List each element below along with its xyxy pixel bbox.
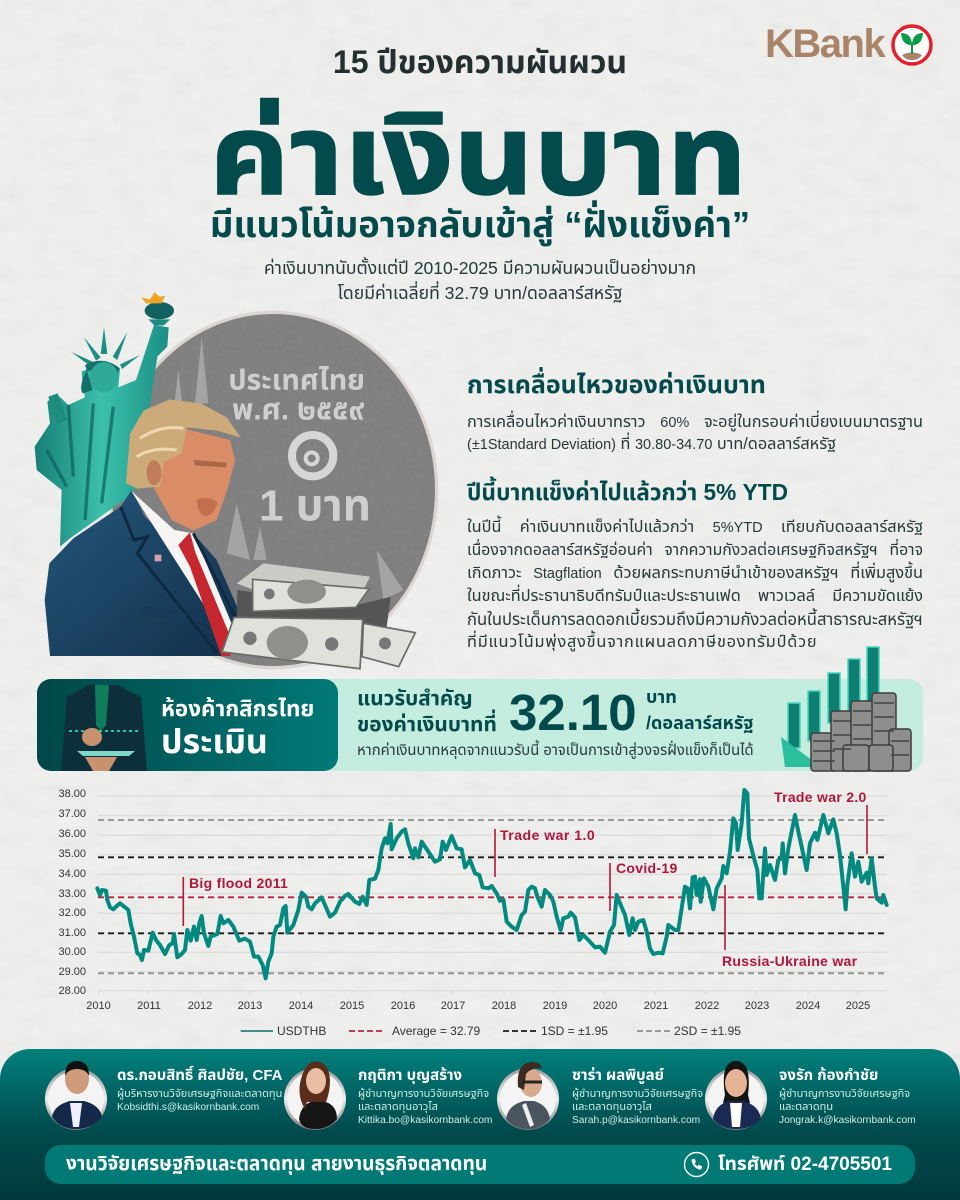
contact text: และตลาดทุนอาวุโส bbox=[572, 1101, 652, 1113]
x axis labels: 2017 bbox=[441, 1000, 465, 1012]
body text: year to date: ที่มีแนวโน้มพุ่งสูงขึ้นจากแผนลดภาษีของทรัมป์ด้วย bbox=[467, 633, 817, 651]
annotation: Trade war 2.0: Trade war 2.0 bbox=[774, 789, 867, 805]
contact text: Jongrak.k@kasikornbank.com bbox=[779, 1115, 916, 1126]
x axis labels: 2015 bbox=[340, 1000, 364, 1012]
x axis labels: 2024 bbox=[796, 1000, 820, 1012]
assessment label: ห้องค้ากสิกรไทย bbox=[161, 696, 314, 721]
contact text: ผู้ชำนาญการงานวิจัยเศรษฐกิจ bbox=[572, 1088, 703, 1100]
contact text bbox=[358, 1067, 492, 1126]
contact text: จงรัก ก้องกำชัย bbox=[779, 1067, 878, 1084]
y axis labels: 34.00 bbox=[58, 868, 86, 880]
contact bar bbox=[45, 1145, 915, 1184]
icon: statue of liberty bbox=[35, 292, 174, 547]
annotation: Russia-Ukraine war: Russia-Ukraine war bbox=[722, 953, 858, 969]
department name: งานวิจัยเศรษฐกิจและตลาดทุน สายงานธุรกิจตลาดทุน bbox=[66, 1154, 487, 1175]
dark panel: assessment bbox=[37, 679, 338, 771]
legend: 2SD = ±1.95 bbox=[674, 1024, 741, 1038]
y axis labels: 31.00 bbox=[58, 927, 86, 939]
intro text: ค่าเงินบาทนับตั้งแต่ปี 2010-2025 มีความผันผวนเป็นอย่างมาก bbox=[264, 258, 696, 278]
coin: ประเทศไทย bbox=[228, 364, 365, 396]
assessment word: ประเมิน bbox=[161, 723, 268, 761]
y axis labels bbox=[58, 788, 86, 997]
body text: year to date: กันในประเด็นการลดดอกเบี้ยรวมถึงมีความกังวลต่อหนี้สาธารณะสหรัฐฯ bbox=[467, 610, 923, 629]
banknotes stack bbox=[222, 563, 415, 669]
legend: Average = 32.79 bbox=[392, 1024, 481, 1038]
x axis labels bbox=[86, 1000, 870, 1012]
avatar bbox=[45, 1061, 107, 1130]
contact: Jongrak bbox=[705, 1061, 916, 1130]
annotation: Trade war 1.0 bbox=[495, 827, 595, 877]
contact text: ดร.กอบสิทธิ์ ศิลปชัย, CFA bbox=[117, 1067, 283, 1084]
support label: แนวรับสำคัญ bbox=[357, 687, 473, 710]
contact text: ซาร่า ผลพิบูลย์ bbox=[572, 1067, 664, 1084]
contact: Kittika bbox=[284, 1062, 492, 1130]
panel: year to date text bbox=[466, 476, 923, 652]
contact text: ผู้บริหารงานวิจัยเศรษฐกิจและตลาดทุน bbox=[117, 1088, 282, 1100]
x axis labels: 2025 bbox=[846, 1000, 870, 1012]
annotation: Covid-19: Covid-19 bbox=[616, 860, 678, 876]
y axis labels: 28.00 bbox=[58, 985, 86, 997]
contact text bbox=[117, 1066, 283, 1113]
x axis labels: 2012 bbox=[188, 1000, 212, 1012]
annotation: Russia-Ukraine war bbox=[722, 885, 858, 969]
annotation: Big flood 2011 bbox=[183, 875, 288, 926]
contact text: ผู้ชำนาญการงานวิจัยเศรษฐกิจ bbox=[358, 1088, 489, 1100]
subtitle: มีแนวโน้มอาจกลับเข้าสู่ “ฝั่งแข็งค่า” bbox=[210, 204, 750, 245]
legend: USDTHB bbox=[277, 1024, 326, 1038]
x axis labels: 2010 bbox=[86, 1000, 111, 1012]
heading: year to date: ปีนี้บาทแข็งค่าไปแล้วกว่า 5% YTD bbox=[467, 479, 788, 505]
annotation: Trade war 1.0: Trade war 1.0 bbox=[500, 827, 595, 843]
phone number: โทรศัพท์ 02-4705501 bbox=[718, 1154, 892, 1175]
logo: KBank bbox=[765, 22, 933, 66]
y axis labels: 36.00 bbox=[58, 828, 86, 840]
contact text bbox=[779, 1067, 916, 1126]
avatar bbox=[284, 1062, 346, 1130]
body text: year to date: เกิดภาวะ Stagflation ด้วยผลกระทบภาษีนำเข้าของสหรัฐฯ ที่เพิ่มสูงขึ้น bbox=[467, 564, 923, 582]
support value: 32.10 bbox=[509, 684, 637, 741]
avatar bbox=[705, 1061, 767, 1130]
support note: หากค่าเงินบาทหลุดจากแนวรับนี้ อาจเป็นการเข้าสู่วงจรฝั่งแข็งก็เป็นได้ bbox=[357, 743, 754, 759]
x axis labels: 2016 bbox=[391, 1000, 415, 1012]
support unit bbox=[646, 687, 753, 733]
x axis labels: 2014 bbox=[289, 1000, 313, 1012]
contact text bbox=[572, 1067, 703, 1126]
body text: baht movement bbox=[467, 410, 923, 453]
light strip background bbox=[37, 679, 923, 771]
reference lines bbox=[98, 820, 887, 973]
icon: glass bars and coin stacks bbox=[781, 646, 912, 772]
y axis labels: 35.00 bbox=[58, 848, 86, 860]
kicker heading: 15 ปีของความผันผวน bbox=[333, 44, 627, 80]
logo wordmark: KBank bbox=[765, 22, 884, 66]
contact text: Kittika.bo@kasikornbank.com bbox=[358, 1115, 492, 1126]
annotation: Trade war 2.0 bbox=[774, 789, 867, 854]
body text: year to date: ในขณะที่ประธานาธิบดีทรัมป์และประธานเฟด พาวเวลล์ มีความขัดแย้ง bbox=[467, 587, 923, 605]
x axis labels: 2019 bbox=[543, 1000, 567, 1012]
body text: baht movement: (±1Standard Deviation) ที่ 30.80-34.70 บาท/ดอลลาร์สหรัฐ bbox=[467, 435, 836, 453]
panel: footer contacts bbox=[0, 1049, 960, 1200]
main title: ค่าเงินบาท bbox=[209, 93, 747, 218]
x axis labels: 2023 bbox=[745, 1000, 769, 1012]
body text: baht movement: การเคลื่อนไหวค่าเงินบาทราว 60% จะอยู่ในกรอบค่าเบี่ยงเบนมาตรฐาน bbox=[467, 413, 923, 431]
y axis labels: 29.00 bbox=[58, 966, 86, 978]
USDTHB line bbox=[97, 790, 887, 978]
panel: support level strip bbox=[37, 646, 923, 772]
y axis labels: 38.00 bbox=[58, 788, 86, 800]
chart: USDTHB line 2010-2025 bbox=[58, 788, 889, 1038]
legend bbox=[241, 1024, 741, 1038]
annotation: Covid-19 bbox=[610, 860, 678, 911]
y axis labels: 30.00 bbox=[58, 946, 86, 958]
annotation: Big flood 2011: Big flood 2011 bbox=[189, 875, 288, 891]
horizontal grid bbox=[98, 796, 887, 995]
x axis labels: 2011 bbox=[137, 1000, 161, 1012]
x axis labels: 2021 bbox=[644, 1000, 668, 1012]
x axis labels: 2018 bbox=[492, 1000, 516, 1012]
intro text: โดยมีค่าเฉลี่ยที่ 32.79 บาท/ดอลลาร์สหรัฐ bbox=[338, 283, 622, 303]
contact: Kobsidthi bbox=[45, 1061, 283, 1130]
body text: year to date bbox=[467, 516, 923, 652]
y axis labels: 37.00 bbox=[58, 808, 86, 820]
intro text bbox=[264, 257, 696, 303]
legend: 1SD = ±1.95 bbox=[541, 1024, 608, 1038]
body text: year to date: ในปีนี้ ค่าเงินบาทแข็งค่าไปแล้วกว่า 5%YTD เทียบกับดอลลาร์สหรัฐ bbox=[467, 518, 923, 536]
support label bbox=[357, 687, 497, 736]
panel: baht movement text bbox=[467, 367, 923, 453]
heading: baht movement: การเคลื่อนไหวของค่าเงินบาท bbox=[467, 371, 766, 399]
icon: phone bbox=[684, 1152, 710, 1178]
support unit: บาท bbox=[646, 687, 677, 707]
y axis labels: 33.00 bbox=[58, 888, 86, 900]
coin: 1 บาท bbox=[259, 482, 371, 531]
avatar bbox=[497, 1062, 559, 1130]
coin: พ.ศ. ๒๕๕๙ bbox=[232, 393, 365, 426]
x axis labels: 2020 bbox=[593, 1000, 617, 1012]
title block bbox=[209, 44, 750, 303]
support unit: /ดอลลาร์สหรัฐ bbox=[646, 713, 753, 733]
x axis labels: 2022 bbox=[695, 1000, 719, 1012]
portrait figure in suit bbox=[45, 399, 241, 656]
icon: man with tablet bbox=[61, 685, 147, 771]
body text: year to date: เนื่องจากดอลลาร์สหรัฐอ่อนค่า จากความกังวลต่อเศรษฐกิจสหรัฐฯ ที่อาจ bbox=[467, 542, 923, 559]
contact text: กฤติกา บุญสร้าง bbox=[358, 1067, 462, 1084]
y axis labels: 32.00 bbox=[58, 907, 86, 919]
x axis labels: 2013 bbox=[238, 1000, 262, 1012]
contact text: Sarah.p@kasikornbank.com bbox=[572, 1115, 700, 1126]
contact text: ผู้ชำนาญการงานวิจัยเศรษฐกิจ bbox=[779, 1088, 910, 1100]
support label: ของค่าเงินบาทที่ bbox=[357, 713, 497, 736]
contact text: Kobsidthi.s@kasikornbank.com bbox=[117, 1102, 259, 1113]
contact text: และตลาดทุนอาวุโส bbox=[358, 1101, 438, 1113]
logo emblem: green leaves bbox=[891, 24, 933, 66]
contact: Sarah bbox=[497, 1062, 703, 1130]
hero illustration: coin, statue, portrait, banknotes bbox=[34, 292, 438, 670]
contact text: และตลาดทุน bbox=[779, 1101, 833, 1113]
coin bbox=[108, 311, 438, 669]
